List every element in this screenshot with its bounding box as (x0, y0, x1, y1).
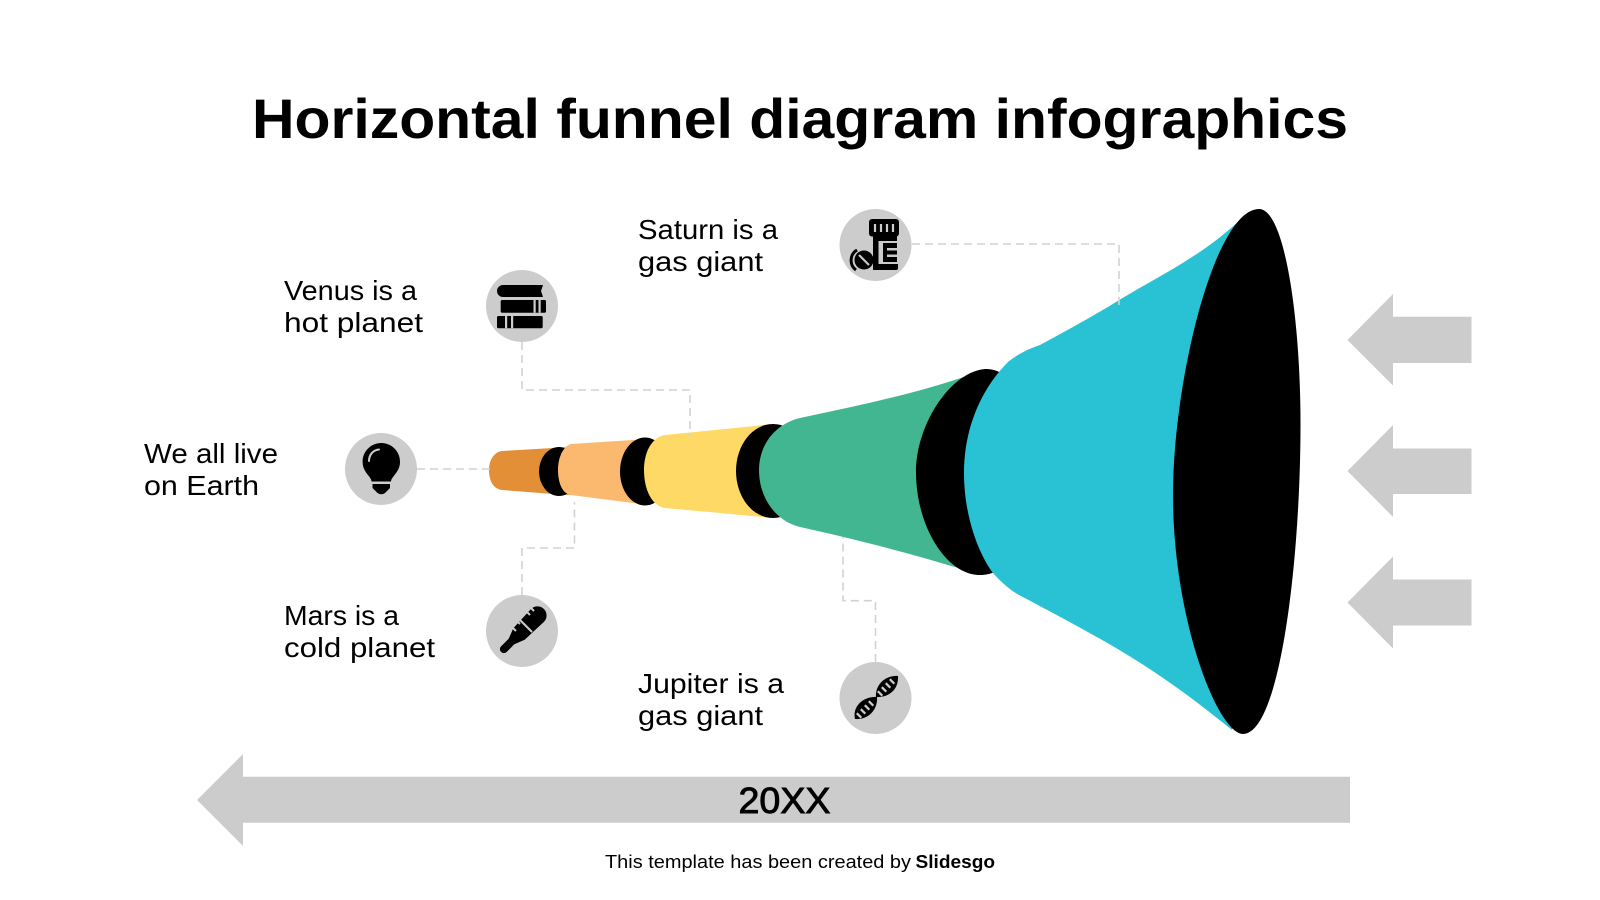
timeline arrow (197, 754, 1350, 846)
funnel segment: yellow (644, 424, 770, 518)
footer credit: This template has been created by (605, 852, 911, 872)
funnel ring 4 (620, 438, 670, 506)
label: Mars (284, 600, 435, 663)
label: Jupiter (638, 668, 784, 731)
label: Saturn (638, 214, 778, 277)
input arrow: bottom (1348, 556, 1472, 648)
label: Mars: Mars is a (284, 600, 399, 631)
icon: medicine bottle (840, 209, 912, 281)
icon: light bulb (345, 433, 417, 505)
label: Earth (144, 438, 278, 501)
label: Jupiter: Jupiter is a (638, 668, 784, 699)
icon: thermometer (486, 595, 558, 667)
funnel ring 3 (736, 424, 810, 518)
title: Horizontal funnel diagram infographics (252, 87, 1348, 150)
connector: Mars (522, 502, 574, 595)
funnel segment: cyan (964, 215, 1260, 730)
funnel ring 2 (916, 369, 1050, 575)
label: Mars: cold planet (284, 632, 435, 663)
connector: Earth (417, 468, 490, 470)
connector: Saturn (912, 244, 1119, 310)
icon: dna (840, 662, 912, 734)
label: Venus: Venus is a (284, 275, 417, 306)
icon: books (486, 270, 558, 342)
label: Earth: We all live (144, 438, 278, 469)
label: Saturn: Saturn is a (638, 214, 778, 245)
label: Jupiter: gas giant (638, 700, 763, 731)
funnel segment: dark orange (489, 447, 570, 495)
connectors (417, 244, 1119, 662)
timeline arrow: 20XX (738, 780, 830, 821)
funnel segment: light orange (558, 439, 650, 505)
label: Venus (284, 275, 423, 338)
label: Venus: hot planet (284, 307, 423, 338)
funnel diagram (489, 209, 1300, 734)
connector: Jupiter (843, 537, 876, 662)
label: Earth: on Earth (144, 470, 259, 501)
funnel mouth (1173, 209, 1300, 734)
label: Saturn: gas giant (638, 246, 763, 277)
input arrow: middle (1348, 425, 1472, 517)
footer credit: Slidesgo (916, 852, 995, 872)
funnel segment: green (759, 374, 990, 570)
funnel ring 5 (539, 447, 579, 496)
connector: Venus (522, 342, 690, 437)
input arrow: top (1348, 294, 1472, 386)
